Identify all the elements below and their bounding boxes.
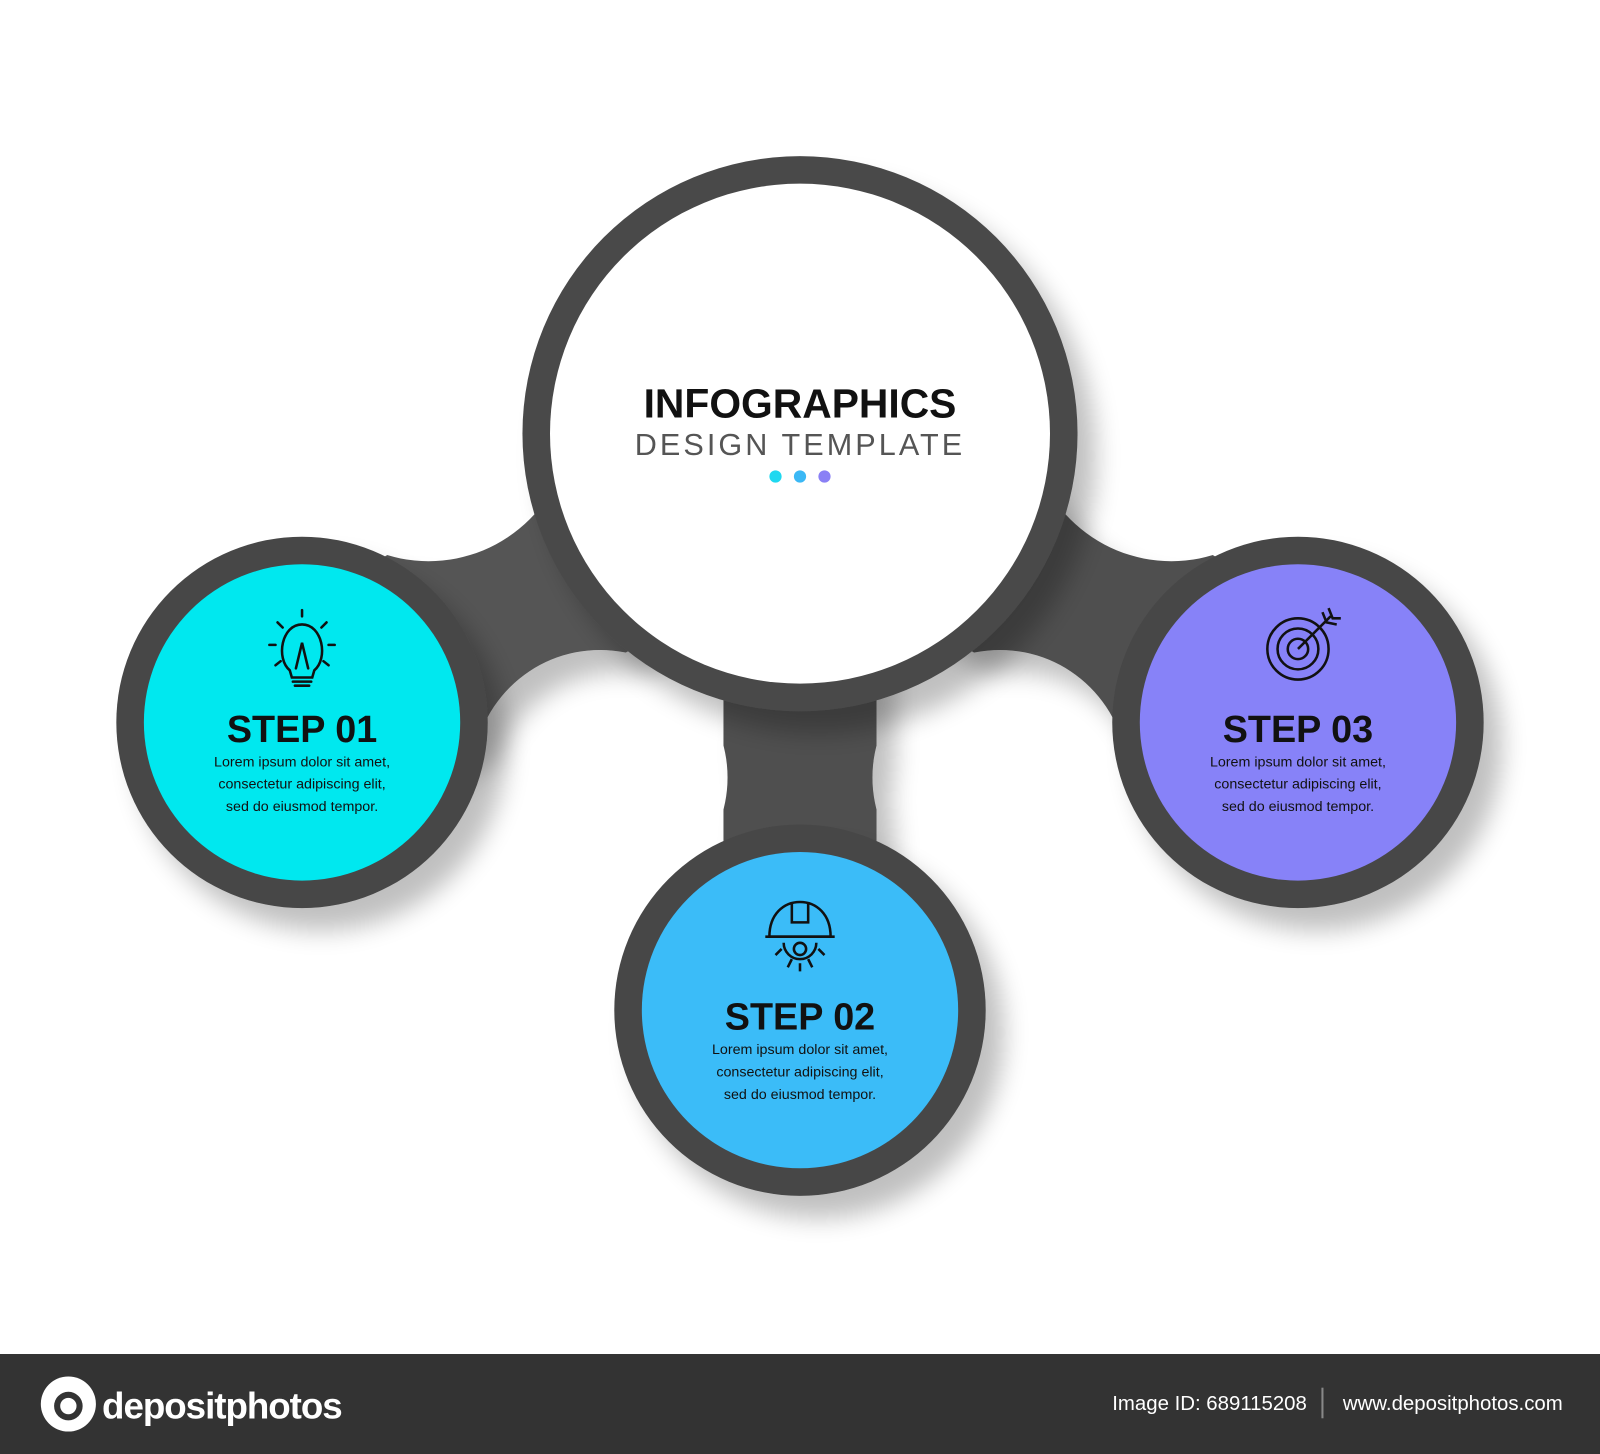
text: consectetur adipiscing elit, bbox=[716, 1064, 884, 1080]
text: Lorem ipsum dolor sit amet, bbox=[214, 754, 390, 770]
text: consectetur adipiscing elit, bbox=[218, 777, 386, 793]
logo text: depositphotos bbox=[102, 1385, 342, 1426]
panel: step 02 bbox=[614, 824, 986, 1196]
text: Lorem ipsum dolor sit amet, bbox=[712, 1042, 888, 1058]
subtitle: DESIGN TEMPLATE bbox=[635, 428, 965, 462]
panel: step 01 bbox=[116, 537, 488, 908]
icon: light bulb bbox=[269, 610, 335, 686]
diagram: connected circles bbox=[116, 156, 1484, 1196]
icon: logo camera bbox=[41, 1376, 96, 1432]
website: www.depositphotos.com bbox=[1342, 1393, 1563, 1415]
panel: step 03 bbox=[1112, 537, 1484, 908]
icon: target bbox=[1267, 608, 1341, 680]
text: sed do eiusmod tempor. bbox=[1222, 799, 1374, 815]
heading: STEP 03 bbox=[1223, 708, 1373, 750]
heading: STEP 01 bbox=[227, 708, 377, 750]
heading: STEP 02 bbox=[725, 996, 875, 1038]
footer bar bbox=[0, 1354, 1600, 1454]
main circle bbox=[522, 156, 1078, 711]
text: sed do eiusmod tempor. bbox=[724, 1087, 876, 1103]
image id: Image ID: 689115208 bbox=[1112, 1393, 1307, 1415]
text: sed do eiusmod tempor. bbox=[226, 799, 378, 815]
text: Lorem ipsum dolor sit amet, bbox=[1210, 754, 1386, 770]
icon: helmet gear bbox=[765, 902, 835, 971]
dots bbox=[769, 470, 831, 483]
title: INFOGRAPHICS bbox=[644, 380, 956, 426]
connector bridges bbox=[385, 497, 1215, 858]
text: consectetur adipiscing elit, bbox=[1214, 777, 1382, 793]
